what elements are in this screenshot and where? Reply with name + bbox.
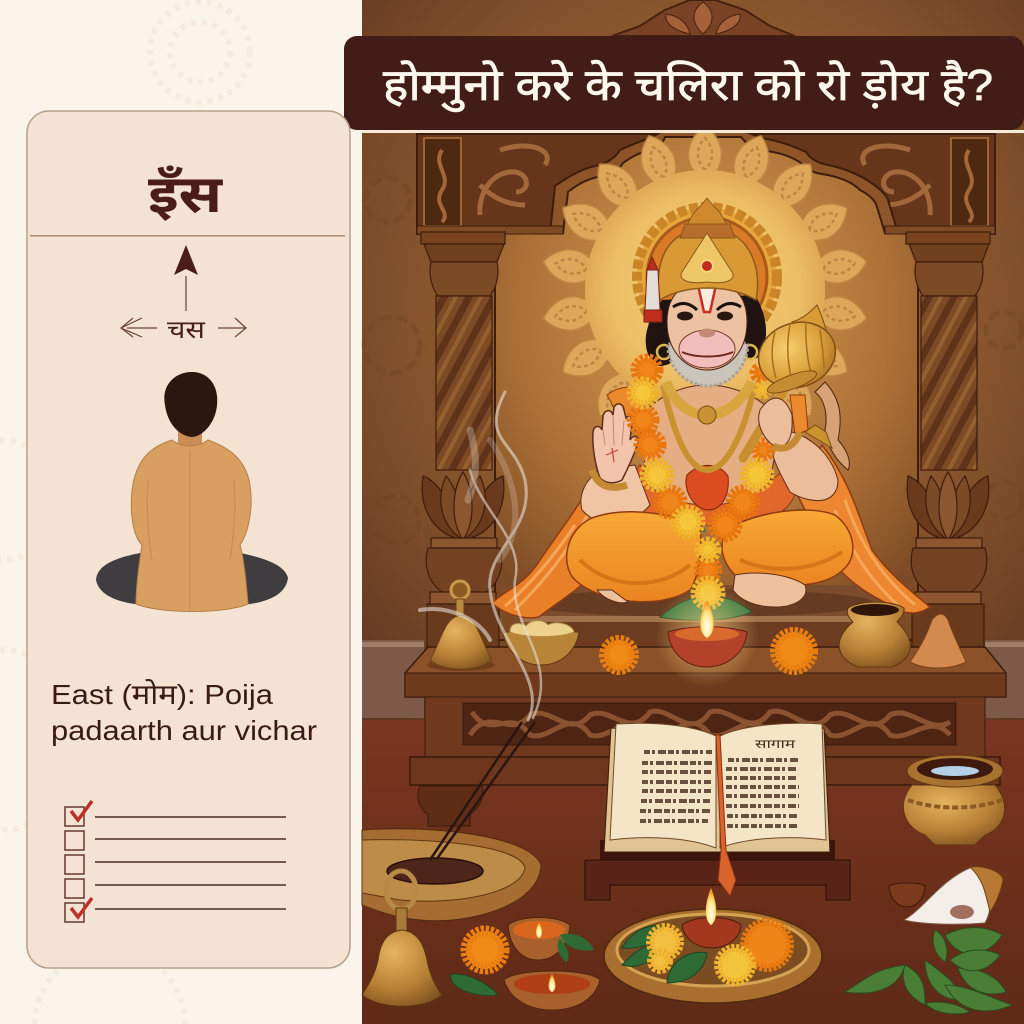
shrine crest xyxy=(612,0,795,36)
pendant xyxy=(698,406,716,424)
diya glow xyxy=(655,583,759,687)
thali leaves xyxy=(622,925,707,983)
beard xyxy=(668,338,748,386)
card heading: इँस xyxy=(148,165,224,224)
book stand xyxy=(585,840,850,900)
lower floor lamp xyxy=(504,971,600,1010)
left background panel xyxy=(0,0,362,1024)
sweet bowl xyxy=(503,632,579,665)
incense smoke xyxy=(420,392,541,720)
info card xyxy=(27,111,350,968)
incense sticks xyxy=(430,722,535,860)
crown halo xyxy=(637,207,777,347)
floor leaf xyxy=(450,974,498,995)
face xyxy=(667,282,747,370)
diya oil xyxy=(675,627,739,641)
tail xyxy=(815,382,849,470)
marigold left xyxy=(604,640,634,670)
mouth xyxy=(682,352,733,356)
left page text xyxy=(640,752,712,821)
bracelet xyxy=(592,470,627,487)
right earring xyxy=(743,345,757,359)
leaf base xyxy=(660,596,752,620)
table xyxy=(405,647,1006,826)
sash xyxy=(686,465,728,510)
floor xyxy=(362,720,1024,1024)
sweets xyxy=(510,621,574,636)
ribbon xyxy=(716,735,736,896)
nose xyxy=(699,328,715,338)
torso xyxy=(640,385,780,510)
seat platform xyxy=(510,585,900,650)
title text: होम्मुनो करे के चलिरा को रो ड़ोय है? xyxy=(383,59,993,113)
checklist xyxy=(65,801,286,922)
left leg xyxy=(567,512,701,602)
small cup xyxy=(889,883,925,907)
crown xyxy=(658,233,758,300)
back wall xyxy=(362,0,1024,725)
bilva leaves xyxy=(845,928,1012,1014)
thali flowers xyxy=(650,922,790,982)
right page heading: सागाम xyxy=(755,737,796,751)
water pot xyxy=(903,755,1005,845)
small brass bell xyxy=(427,581,495,671)
right page text xyxy=(726,760,799,826)
left earring xyxy=(657,345,671,359)
mace cone xyxy=(792,305,828,348)
mace ribs xyxy=(772,322,824,382)
pot opening xyxy=(851,604,899,616)
brows xyxy=(673,303,741,310)
left pillar xyxy=(421,232,505,662)
left arm xyxy=(581,465,650,524)
right drape xyxy=(795,445,930,613)
crown gem xyxy=(701,260,713,272)
hair xyxy=(642,295,766,366)
right shoulder cloth xyxy=(790,395,808,435)
garland orange xyxy=(631,358,771,580)
right leg xyxy=(722,510,853,585)
crown tassel xyxy=(644,257,662,322)
upper floor lamp xyxy=(508,918,594,962)
right eye xyxy=(717,312,733,320)
mace collar xyxy=(765,367,819,397)
crown centre xyxy=(681,233,733,283)
marigold right xyxy=(775,632,813,670)
left drape xyxy=(492,465,650,618)
thali diya xyxy=(682,918,741,948)
mace handle xyxy=(743,385,787,458)
mace head xyxy=(750,313,844,397)
brass plate with incense xyxy=(362,829,541,921)
direction label: चस xyxy=(167,316,206,344)
north arrow xyxy=(174,245,198,311)
East description: East (मोम): Poija xyxy=(51,678,273,710)
right armband xyxy=(805,425,832,448)
floor marigold xyxy=(466,931,504,969)
table diya xyxy=(668,627,747,667)
title bar xyxy=(344,36,1024,133)
tilak xyxy=(698,285,716,312)
muzzle xyxy=(679,330,735,368)
puja thali xyxy=(604,888,822,1003)
hand bell xyxy=(362,871,442,1006)
right pillar xyxy=(906,232,990,662)
conch cone xyxy=(910,614,966,668)
table offerings xyxy=(427,581,966,687)
east arrow xyxy=(218,318,246,337)
eyes xyxy=(677,312,693,320)
fold shadow xyxy=(580,552,842,583)
table pot xyxy=(839,602,910,667)
garland yellow xyxy=(631,381,770,606)
diya flame xyxy=(700,600,714,638)
right arm xyxy=(772,430,838,501)
seated person xyxy=(96,372,288,612)
west arrow xyxy=(121,318,157,337)
description line two: padaarth aur vichar xyxy=(51,715,317,746)
Hanuman figure xyxy=(492,198,930,620)
golden necklace xyxy=(663,385,755,470)
crown band xyxy=(680,224,735,238)
conch shell xyxy=(904,867,1003,924)
right bracelet xyxy=(773,432,800,448)
left shoulder cloth xyxy=(607,387,645,435)
crown finial xyxy=(688,198,726,224)
necklace inner xyxy=(666,382,752,415)
waist sash xyxy=(635,510,800,530)
right hand xyxy=(759,398,792,448)
waist cloth xyxy=(627,465,796,525)
open book xyxy=(604,723,830,896)
shrine arch and niche xyxy=(417,130,995,640)
mandala halo xyxy=(541,126,869,426)
check marks xyxy=(71,801,92,917)
foot left xyxy=(597,590,628,603)
thali flame xyxy=(706,888,716,925)
raised hand xyxy=(593,404,638,483)
foot right xyxy=(733,573,806,607)
